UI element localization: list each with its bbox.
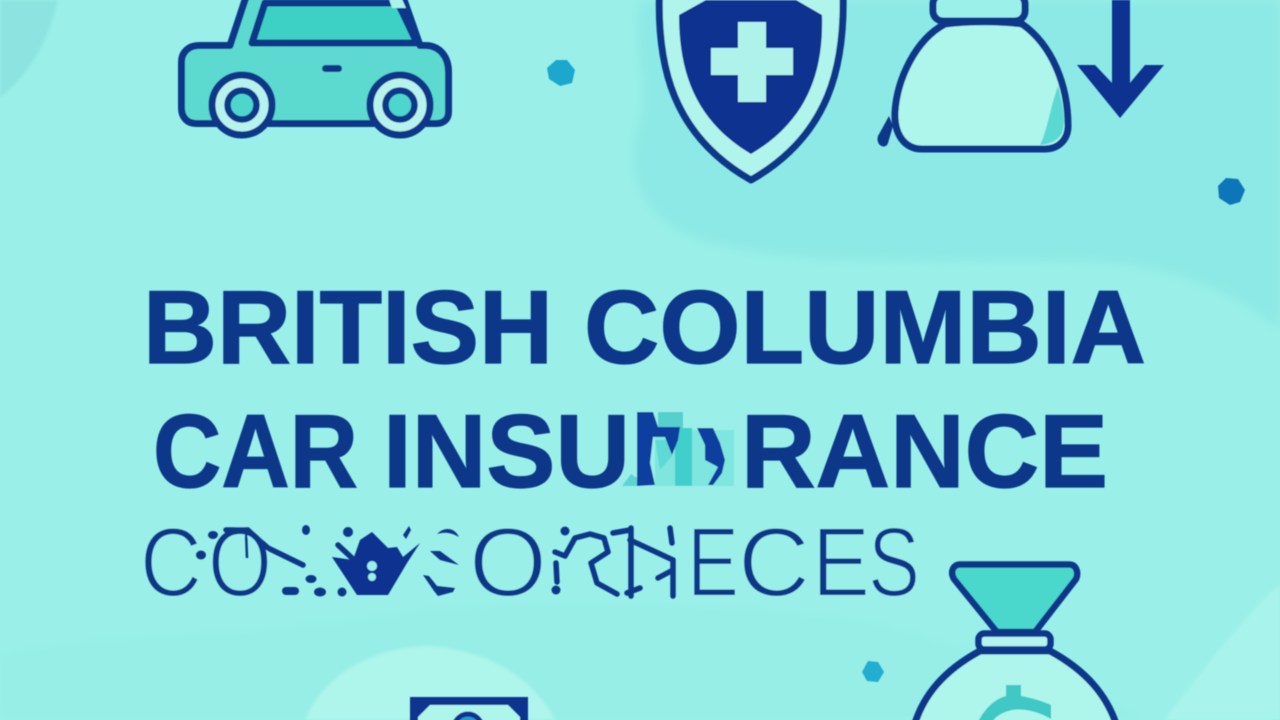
bag shading — [1040, 86, 1064, 145]
title: British Columbia: BRITISH — [143, 270, 553, 386]
decorative dots — [547, 60, 1245, 682]
subtitle letters — [140, 507, 920, 617]
title: Car Insurance: CAR — [153, 394, 358, 510]
title: Car Insurance: RANCE — [741, 394, 1108, 510]
title: Car Insurance: A — [640, 394, 728, 510]
bag neck — [933, 0, 1025, 21]
title: British Columbia — [143, 270, 1146, 386]
subtitle debris — [196, 525, 459, 596]
funnel top — [952, 564, 1077, 632]
bag body — [913, 651, 1118, 720]
icon: shield with medical cross — [659, 0, 843, 180]
icon: car — [182, 0, 448, 135]
neck band — [978, 634, 1050, 650]
subtitle letters: O — [208, 507, 272, 617]
subtitle crown splash — [332, 532, 420, 595]
icon: money bag with down arrow — [877, 0, 1164, 149]
subtitle letters: S — [868, 507, 920, 617]
title blot over letter — [622, 408, 740, 492]
bag body — [895, 22, 1068, 149]
icon: banknote (cropped at bottom) — [410, 697, 528, 720]
subtitle teardrop distortion — [226, 530, 303, 565]
bag tail — [877, 116, 893, 147]
dollar sign — [978, 685, 1051, 720]
icon: money bag with dollar sign — [913, 564, 1118, 720]
title: Car Insurance — [153, 394, 1108, 510]
title: British Columbia: COLUMBIA — [584, 270, 1146, 386]
subtitle letters: E — [687, 507, 739, 617]
subtitle letters: C — [738, 507, 810, 617]
subtitle letters: O — [469, 507, 547, 617]
subtitle letters: E — [812, 507, 870, 617]
down arrow — [1077, 0, 1164, 118]
subtitle broken strokes — [552, 526, 673, 596]
subtitle: Consequences (distorted lettering) — [140, 507, 920, 617]
title: Car Insurance: INSU — [383, 394, 630, 510]
subtitle letters: C — [140, 507, 202, 617]
